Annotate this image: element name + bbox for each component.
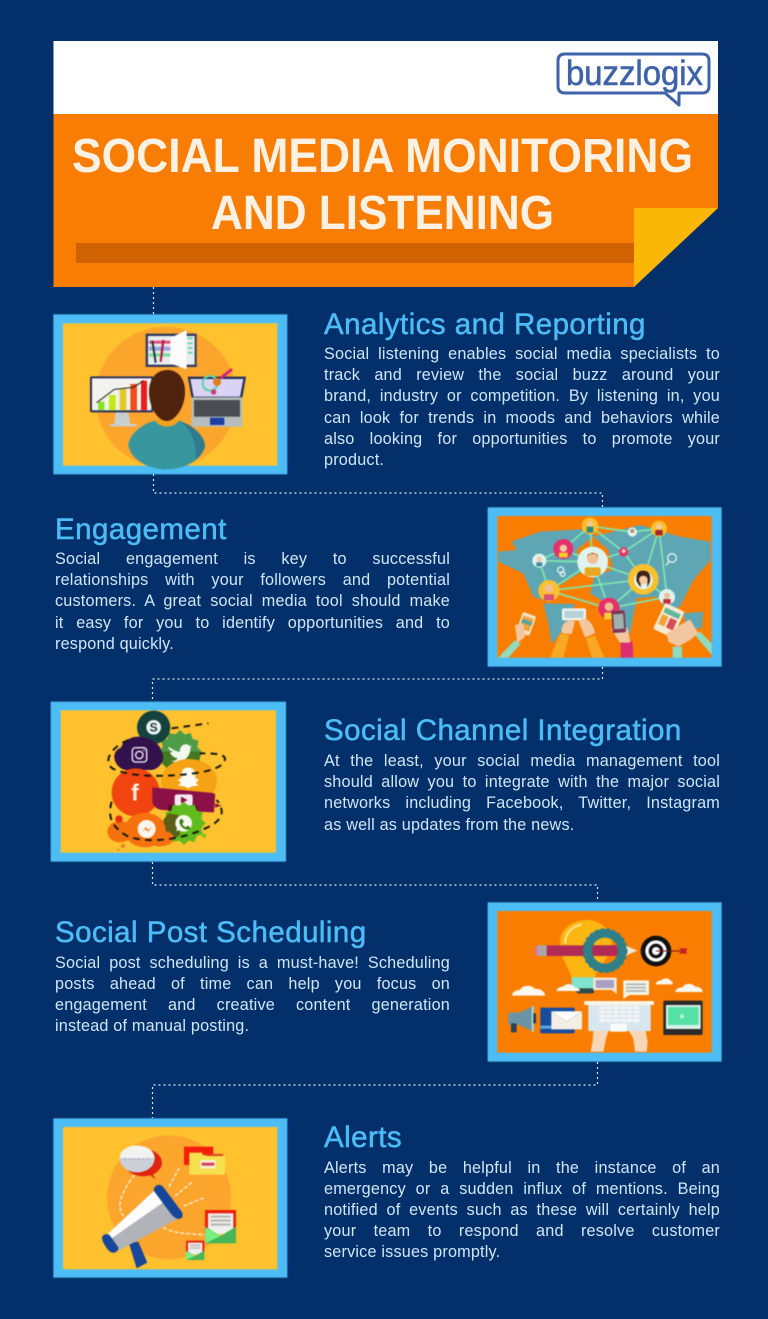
text: analytics: also looking for opportunities to promote your [324, 430, 720, 448]
panel: alerts illustration [52, 1118, 288, 1278]
icon: facebook circle: f [131, 780, 139, 806]
text: engagement: relationships with your followers and potential [55, 571, 450, 589]
icon: whatsapp badge [162, 802, 206, 845]
speech bubbles [593, 978, 649, 999]
icon: envelope on book [540, 1008, 582, 1033]
dashed orbit paths [108, 723, 225, 840]
text: post scheduling [55, 954, 450, 1035]
icon: pencil [535, 945, 637, 956]
text: post scheduling: posts ahead of time can help you focus on [55, 975, 450, 993]
dashed sound paths [120, 1168, 205, 1235]
orange title panel [54, 114, 718, 287]
heading: analytics: Analytics and Reporting [324, 308, 646, 341]
title: AND LISTENING [211, 187, 554, 240]
icon: megaphone [102, 1185, 183, 1268]
network links [539, 526, 667, 608]
heading: engagement: Engagement [55, 513, 227, 546]
icon: folders [184, 1147, 225, 1175]
text: analytics: can look for trends in moods and behaviors while [324, 409, 720, 427]
text: engagement: Social engagement is key to successful [55, 550, 450, 568]
panel: analytics illustration [52, 314, 288, 476]
icon: target [641, 936, 687, 966]
icon: skype circle: S [150, 721, 158, 735]
icon: snapchat blob [161, 759, 217, 803]
text: channel integration: as well as updates from the news. [324, 816, 574, 834]
panel: channel integration illustration [50, 701, 287, 862]
icon: messenger blobs [107, 813, 206, 851]
text: engagement [55, 550, 450, 653]
text: alerts: notified of events such as these will certainly help [324, 1201, 720, 1219]
icon: megaphone [508, 1006, 536, 1032]
text: engagement: it easy for you to identify opportunities and to [55, 614, 450, 632]
icon: large envelope [205, 1210, 236, 1243]
folded corner [634, 208, 718, 287]
people nodes [532, 518, 675, 619]
icon: magnifier [558, 554, 676, 576]
text: channel integration: At the least, your social media management tool [324, 752, 720, 770]
icon: facebook circle [112, 768, 160, 816]
icon: speech bubble [120, 1146, 162, 1179]
text: post scheduling: instead of manual posting. [55, 1017, 249, 1035]
white header strip [54, 41, 718, 114]
text: post scheduling: engagement and creative content generation [55, 996, 450, 1014]
icon: gear [584, 929, 626, 972]
icon: light bulb [560, 920, 612, 993]
text: alerts: your team to respond and resolve customer [324, 1222, 720, 1240]
text: engagement: customers. A great social media tool should make [55, 592, 450, 610]
icon: laptop [188, 370, 246, 427]
heading: alerts: Alerts [324, 1121, 402, 1154]
title shadow bar [76, 243, 634, 263]
icon: person [128, 370, 205, 469]
logo: buzzlogix: buzzlogix [566, 54, 703, 93]
heading: post scheduling: Social Post Scheduling [55, 916, 367, 949]
text: analytics [324, 345, 720, 469]
clouds [512, 978, 703, 996]
text: channel integration [324, 752, 720, 834]
text: analytics: track and review the social buzz around your [324, 366, 720, 384]
header banner [54, 41, 718, 287]
icon: open book [146, 330, 197, 369]
text: alerts [324, 1158, 720, 1261]
icon: chart monitor [90, 376, 153, 426]
text: alerts: service issues promptly. [324, 1243, 500, 1261]
icon: laptop with hands [584, 1001, 654, 1052]
text: analytics: product. [324, 451, 384, 469]
icon: twitter badge [158, 730, 202, 773]
text: engagement: respond quickly. [55, 635, 174, 653]
text: alerts: emergency or a sudden influx of mentions. Being [324, 1180, 720, 1198]
hands with devices [498, 603, 712, 658]
title: SOCIAL MEDIA MONITORING [72, 130, 693, 183]
icon: youtube tag [152, 787, 222, 812]
icon: skype circle [137, 711, 170, 744]
icon: small envelope [186, 1241, 204, 1260]
text: post scheduling: Social post scheduling is a must-have! Scheduling [55, 954, 450, 972]
title [72, 130, 693, 240]
heading: channel integration: Social Channel Integration [324, 714, 682, 747]
panel: post scheduling illustration [487, 902, 722, 1062]
panel: engagement illustration [487, 506, 722, 668]
text: channel integration: should allow you to integrate with the major social [324, 773, 720, 791]
text: alerts: Alerts may be helpful in the instance of an [324, 1158, 720, 1176]
world map [498, 525, 711, 644]
text: analytics: brand, industry or competition. By listening in, you [324, 387, 720, 405]
text: analytics: Social listening enables social media specialists to [324, 345, 720, 363]
icon: instagram cloud [114, 737, 163, 770]
text: channel integration: networks including Facebook, Twitter, Instagram [324, 794, 720, 812]
icon: tablet [663, 1001, 703, 1035]
